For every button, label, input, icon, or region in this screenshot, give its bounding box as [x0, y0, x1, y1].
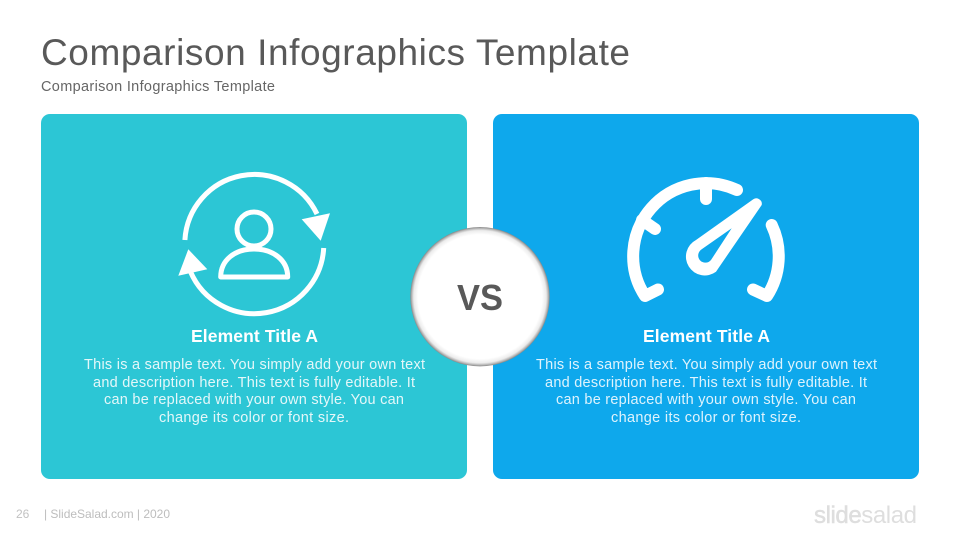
right card body text: This is a sample text. You simply add your own text: [536, 357, 877, 373]
left card body text: and description here. This text is fully editable. It: [93, 375, 415, 391]
left card heading: Element Title A: [191, 326, 318, 346]
left card body text: This is a sample text. You simply add your own text: [84, 357, 425, 373]
icon: user with rotating arrows: [178, 174, 330, 314]
right card body text: and description here. This text is fully editable. It: [545, 375, 867, 391]
panel: left comparison card: [41, 114, 467, 479]
footer source text: | SlideSalad.com | 2020: [44, 507, 170, 521]
right card body text: change its color or font size.: [611, 410, 801, 426]
panel: right comparison card: [493, 114, 919, 479]
left card body text: can be replaced with your own style. You can: [104, 392, 404, 408]
right card heading: Element Title A: [643, 326, 770, 346]
footer page number: 26: [16, 507, 30, 521]
icon: speedometer gauge: [633, 183, 779, 296]
subtitle: Comparison Infographics Template: [41, 79, 275, 95]
left card body text: change its color or font size.: [159, 410, 349, 426]
logo: slidesalad: slidesalad: [814, 502, 917, 529]
title: Comparison Infographics Template: [41, 32, 630, 73]
VS badge: [410, 227, 550, 366]
left card body text: [84, 357, 425, 426]
VS badge: VS: [457, 277, 503, 318]
right card body text: can be replaced with your own style. You can: [556, 392, 856, 408]
right card body text: [536, 357, 877, 426]
